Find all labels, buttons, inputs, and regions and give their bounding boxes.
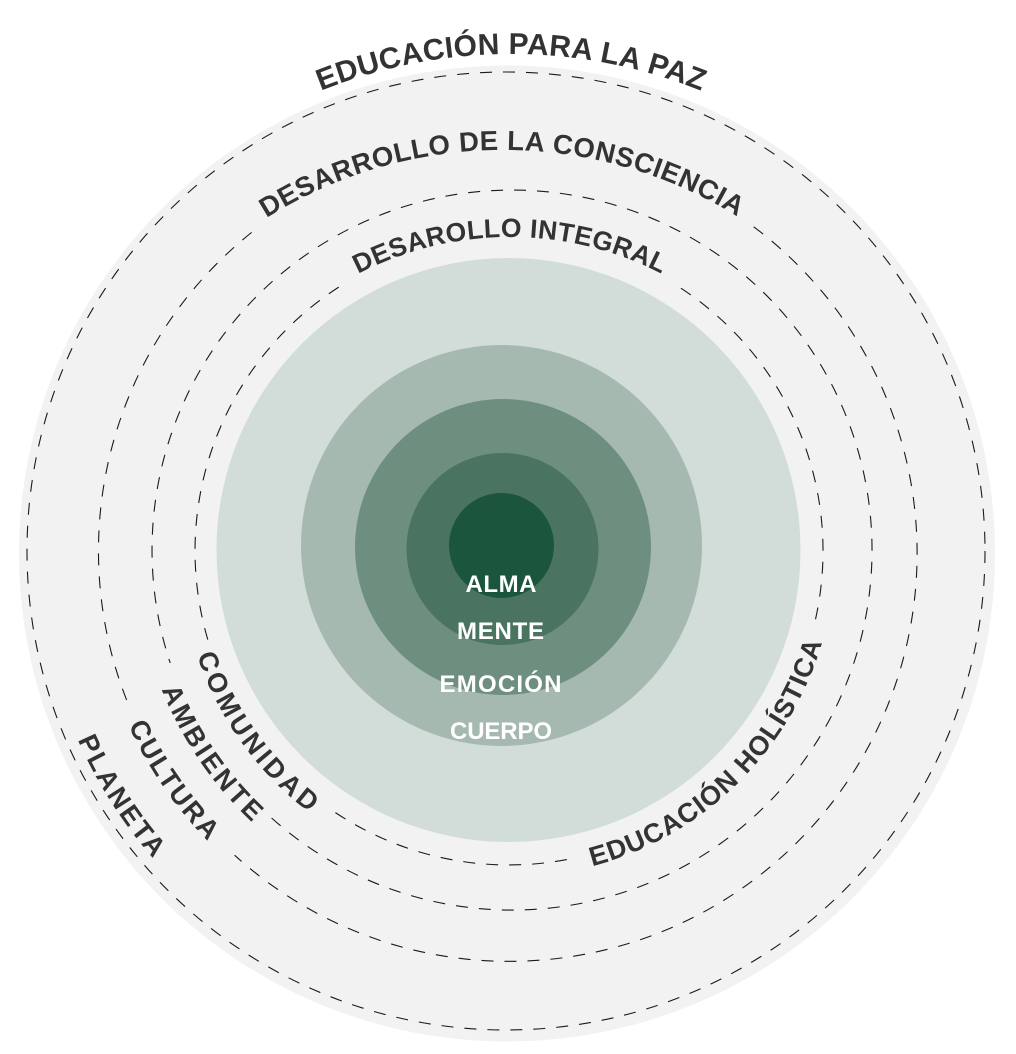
label: educación holística: EDUCACIÓN HOLÍSTICA bbox=[588, 643, 822, 866]
circle: alma bbox=[449, 493, 554, 598]
dashed ring: third bbox=[152, 190, 872, 910]
circle: cuerpo bbox=[301, 345, 702, 746]
label: alma: ALMA bbox=[466, 571, 536, 598]
dashed ring: desarrollo de la consciencia bbox=[98, 227, 917, 961]
label: cuerpo: CUERPO bbox=[450, 718, 552, 745]
label: mente: MENTE bbox=[457, 618, 544, 645]
label: ambiente: AMBIENTE bbox=[162, 689, 264, 822]
circle: mente bbox=[406, 453, 598, 645]
label: desarollo integral: DESAROLLO INTEGRAL bbox=[352, 218, 662, 274]
label: educación para la paz: EDUCACIÓN PARA LA PAZ bbox=[315, 29, 708, 90]
label: comunidad: COMUNIDAD bbox=[199, 652, 317, 808]
label: cultura: CULTURA bbox=[131, 720, 216, 841]
circle: lightest green bbox=[216, 258, 800, 842]
circle: emoción bbox=[355, 399, 651, 695]
label: emoción: EMOCIÓN bbox=[440, 670, 562, 698]
label: desarrollo de la consciencia: DESARROLLO DE LA CONSCIENCIA bbox=[258, 131, 740, 217]
label: planeta: PLANETA bbox=[78, 734, 163, 858]
dashed ring: desarrollo integral bbox=[195, 285, 823, 865]
